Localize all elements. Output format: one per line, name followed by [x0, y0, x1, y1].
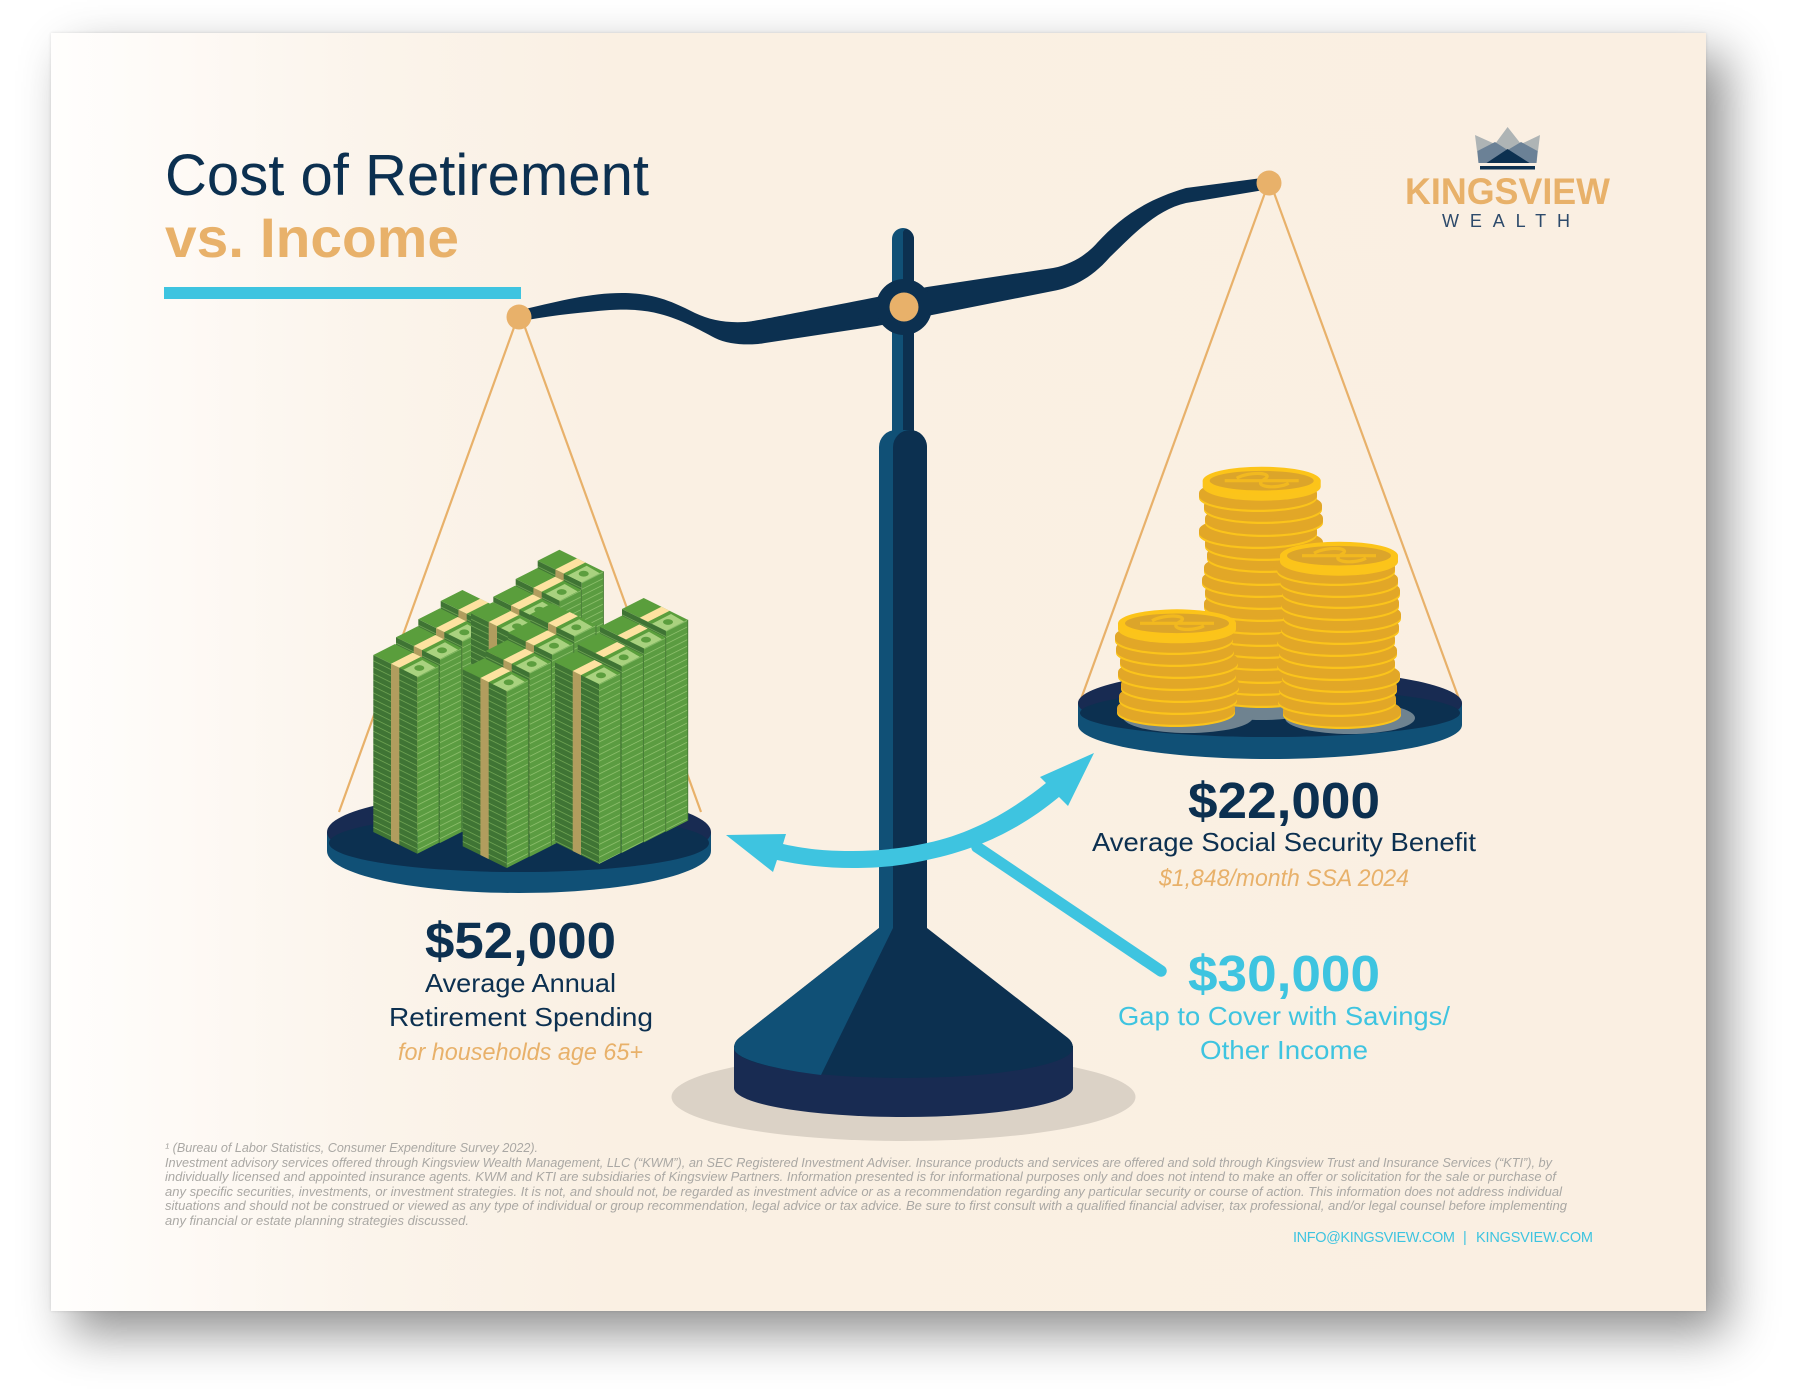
benefit label: Average Social Security Benefit: [1092, 827, 1477, 857]
beam hub: [876, 279, 932, 335]
upper rod: [892, 228, 914, 560]
arrow: double-headed curved arrow: [726, 753, 1094, 872]
base cone: [734, 928, 1073, 1078]
footer disclaimer: ¹ (Bureau of Labor Statistics, Consumer Expenditure Survey 2022).: [165, 1140, 538, 1155]
scale base shadow: [672, 1053, 1136, 1141]
text block: gap to cover: [1118, 945, 1451, 1065]
lower post: [879, 430, 927, 930]
base rim: [734, 1046, 1073, 1117]
title underline bar: [164, 287, 521, 299]
footer disclaimer: individually licensed and appointed insurance agents. KWM and KTI are subsidiaries of Kingsview Partners. Information presented is for informational purposes only and does not intend to make an offer or solicitation for the sale or purchase of: [165, 1169, 1557, 1184]
footer contact line: KINGSVIEW.COM: [1476, 1230, 1593, 1246]
footer contact line: |: [1463, 1230, 1467, 1246]
scale beam: [525, 178, 1264, 344]
gap label line 1: Gap to Cover with Savings/: [1118, 1001, 1451, 1031]
logo: Kingsview Wealth: [1405, 127, 1611, 231]
footer disclaimer: any financial or estate planning strategies discussed.: [165, 1213, 469, 1228]
illustration: stacks of cash: [373, 550, 688, 868]
title line 1: Cost of Retirement: [165, 143, 649, 208]
left knob: [506, 304, 532, 330]
title line 2: vs. Income: [165, 206, 459, 269]
illustration: stacks of coins: [1115, 467, 1415, 734]
right pan: [1078, 669, 1462, 759]
arrow: gap pointer line: [977, 847, 1161, 971]
coin shadows: [1123, 692, 1415, 734]
ropes: left pan: [339, 322, 701, 812]
logo wordmark: KINGSVIEW: [1405, 170, 1611, 212]
ropes: right pan: [1081, 190, 1459, 699]
benefit note: $1,848/month SSA 2024: [1158, 865, 1409, 892]
text block: social security: [1092, 772, 1477, 892]
icon: crown: [1475, 127, 1540, 170]
footer contact line: INFO@KINGSVIEW.COM: [1293, 1230, 1455, 1246]
footer disclaimer: [165, 1140, 1568, 1228]
title: [165, 143, 649, 269]
spending amount: $52,000: [425, 912, 616, 969]
text block: retirement spending: [389, 912, 653, 1066]
left pan: [327, 792, 711, 893]
scale stand: [734, 228, 1073, 1117]
front-right coin stack: [1277, 542, 1401, 729]
logo subline: WEALTH: [1442, 211, 1570, 231]
spending label line 2: Retirement Spending: [389, 1002, 653, 1032]
gap label line 2: Other Income: [1200, 1035, 1368, 1065]
right knob: [1256, 170, 1282, 196]
back coin stack: [1199, 467, 1325, 708]
spending note: for households age 65+: [398, 1039, 643, 1066]
footer contact line: [1293, 1230, 1593, 1246]
footer disclaimer: situations and should not be construed or viewed as any type of individual or group recommendation, legal advice or tax advice. Be sure to first consult with a qualified financial adviser, tax professional, and/or legal counsel before implementing: [165, 1198, 1568, 1213]
front-left coin stack: [1115, 609, 1239, 727]
footer disclaimer: Investment advisory services offered through Kingsview Wealth Management, LLC (“KWM”), an SEC Registered Investment Adviser. Insurance products and services are offered and sold through Kingsview Trust and Insurance Services (“KTI”), by: [165, 1155, 1553, 1170]
gap amount: $30,000: [1188, 945, 1380, 1002]
benefit amount: $22,000: [1188, 772, 1380, 829]
footer disclaimer: any specific securities, investments, or investment strategies. It is not, and should not, be regarded as investment advice or as a recommendation regarding any particular security or course of action. This information does not address individual: [165, 1184, 1563, 1199]
spending label line 1: Average Annual: [425, 968, 616, 998]
